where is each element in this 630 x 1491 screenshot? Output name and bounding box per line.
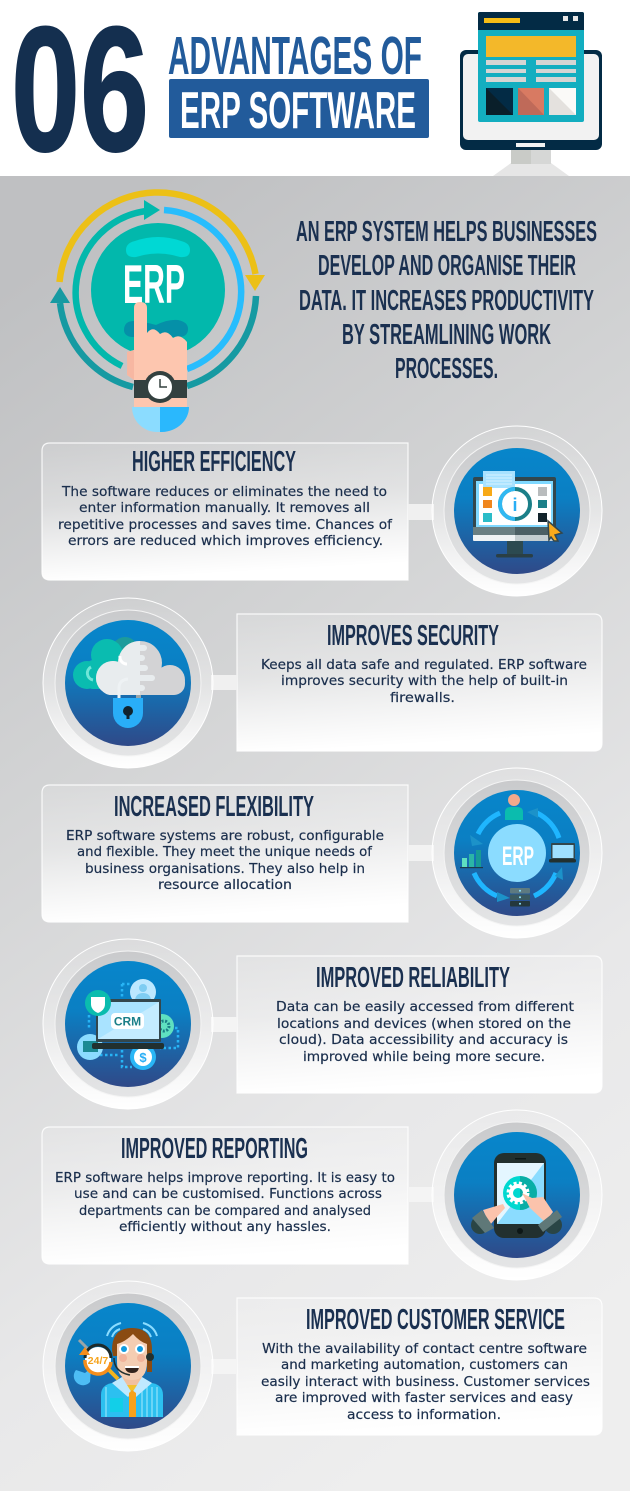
ring xyxy=(432,768,602,938)
icon: CRM laptop: CRM xyxy=(114,1014,141,1028)
body text: repetitive processes and saves time. Chances of xyxy=(58,517,393,533)
body text: use and can be customised. Functions across xyxy=(74,1186,382,1202)
body text: cloud). Data accessibility and accuracy is xyxy=(279,1032,568,1048)
watch xyxy=(134,371,187,403)
panel: improved reliability xyxy=(43,939,602,1109)
connector xyxy=(211,1017,237,1032)
body text: errors are reduced which improves efficiency. xyxy=(68,533,383,549)
icon: monitor with info xyxy=(473,471,562,558)
panel: higher efficiency xyxy=(42,426,602,596)
icon: ERP connections cycle xyxy=(460,794,576,906)
body text: Data can be easily accessed from different xyxy=(276,999,574,1015)
teal circle xyxy=(91,223,225,357)
highlight bottom xyxy=(124,320,188,337)
body text: ERP software helps improve reporting. It is easy to xyxy=(55,1170,395,1186)
connector xyxy=(211,675,237,690)
inner blue arc xyxy=(164,210,241,369)
heading: INCREASED FLEXIBILITY xyxy=(114,791,314,823)
body text xyxy=(261,1341,590,1423)
intro text xyxy=(296,216,597,385)
body text: improved while being more secure. xyxy=(303,1049,545,1065)
body text: access to information. xyxy=(347,1407,501,1423)
body text: With the availability of contact centre software xyxy=(262,1341,587,1357)
icon: monitor with info: i xyxy=(512,495,518,515)
body text xyxy=(58,484,393,549)
ring xyxy=(43,598,213,768)
hand xyxy=(127,302,187,407)
body text: departments can be compared and analysed xyxy=(79,1203,371,1219)
body text xyxy=(276,999,574,1065)
body text: firewalls. xyxy=(390,690,455,706)
dark teal arcs xyxy=(50,287,256,387)
body text: business organisations. They also help in xyxy=(85,861,365,877)
connector xyxy=(408,1187,434,1202)
yellow arc xyxy=(60,192,265,291)
ring xyxy=(43,939,213,1109)
icon: ERP connections cycle: ERP xyxy=(502,841,534,871)
body text xyxy=(66,828,384,893)
icon: CRM laptop: $ xyxy=(139,1050,147,1065)
body text: ERP software systems are robust, configurable xyxy=(66,828,384,844)
cuff xyxy=(132,407,189,432)
card xyxy=(237,614,602,751)
title: advantages of: ADVANTAGES OF xyxy=(168,26,422,86)
card xyxy=(42,1127,408,1264)
connector xyxy=(408,504,434,520)
inner teal arc xyxy=(76,200,160,366)
body text: easily interact with business. Customer services xyxy=(261,1374,590,1390)
title: erp software banner xyxy=(169,79,429,140)
body text: and flexible. They meet the unique needs of xyxy=(77,844,373,860)
heading: IMPROVES SECURITY xyxy=(327,620,499,652)
body text: The software reduces or eliminates the need to xyxy=(61,484,387,500)
intro text: PROCESSES. xyxy=(395,353,498,385)
body text: and marketing automation, customers can xyxy=(281,1357,568,1373)
heading: IMPROVED REPORTING xyxy=(121,1133,308,1165)
connector xyxy=(211,1359,237,1374)
body text: resource allocation xyxy=(158,877,292,893)
icon: support agent with 24/7 xyxy=(74,1323,163,1417)
header background xyxy=(0,0,630,177)
panel: improves security xyxy=(43,598,602,768)
panel: increased flexibility xyxy=(42,768,602,938)
card xyxy=(237,1298,602,1435)
card xyxy=(237,956,602,1093)
icon: CRM laptop xyxy=(77,979,178,1070)
panel: improved reporting xyxy=(42,1110,602,1280)
highlight top xyxy=(126,237,190,257)
icon: ERP cycle with pointing hand xyxy=(50,192,265,432)
body text: improves security with the help of built-in xyxy=(281,673,568,689)
ring xyxy=(432,1110,602,1280)
body text: are improved with faster services and easy xyxy=(275,1390,573,1406)
card xyxy=(42,443,408,580)
ring xyxy=(432,426,602,596)
icon: phone with gear and hands xyxy=(471,1153,562,1238)
ring xyxy=(43,1281,213,1451)
body text: enter information manually. It removes all xyxy=(79,500,370,516)
icon: cloud and padlock xyxy=(73,637,185,728)
icon: support agent with 24/7: 24/7 xyxy=(88,1355,108,1367)
heading: HIGHER EFFICIENCY xyxy=(132,446,296,478)
body text: locations and devices (when stored on the xyxy=(277,1016,571,1032)
ERP label: ERP xyxy=(123,253,185,315)
body text xyxy=(261,657,587,706)
connector xyxy=(408,845,434,861)
body text: Keeps all data safe and regulated. ERP software xyxy=(261,657,587,673)
title: erp software banner: ERP SOFTWARE xyxy=(180,82,416,140)
panel: improved customer service xyxy=(43,1281,602,1451)
body text: efficiently without any hassles. xyxy=(119,1219,331,1235)
icon: computer monitor with window xyxy=(460,12,602,176)
card xyxy=(42,785,408,922)
body text xyxy=(55,1170,395,1235)
